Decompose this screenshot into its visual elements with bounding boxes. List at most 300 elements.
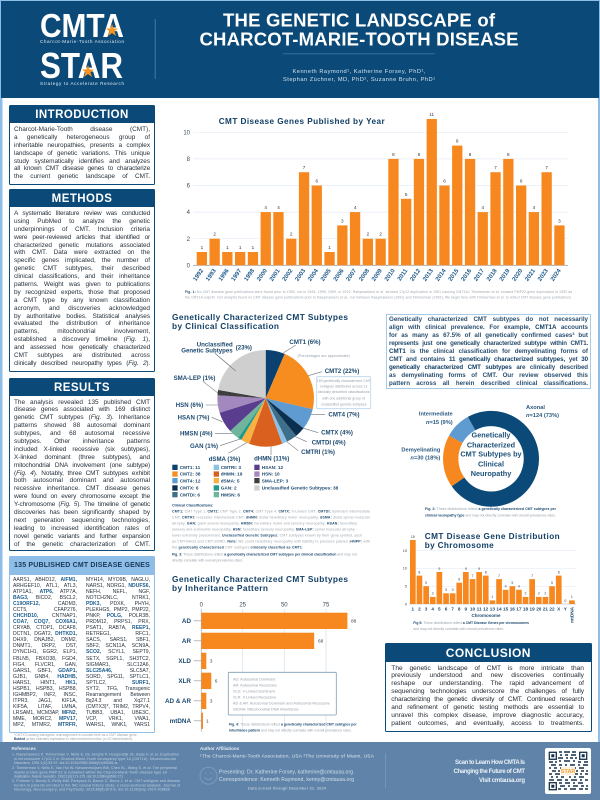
gene list: right column: SLC25A46, SLC5A7, [86, 668, 150, 674]
chart title: clinical classification: Genetically Characterized CMT Subtypes [172, 312, 348, 322]
title [200, 10, 518, 50]
bar chart: gene distribution by chromosome: 2 [432, 592, 434, 596]
gene list: left column: CCT5, CFAP276, [13, 607, 77, 613]
chart title: chromosome: CMT Disease Gene Distribution [425, 532, 560, 541]
presenter and correspondence [219, 770, 354, 790]
pie legend [172, 465, 339, 497]
bar chart: CMT disease genes published by year: 1 [252, 245, 255, 250]
bar chart: CMT disease genes published by year: 6 [316, 178, 319, 184]
text block: results: patterns showed 88 autosomal dominant [14, 422, 150, 429]
bar chart: gene distribution by chromosome: 0 [405, 602, 407, 606]
clinical classifications note [172, 504, 371, 549]
text block: clinical prevalence: for as many as 67.5% of all genetically confirmed cases³ but [389, 332, 588, 339]
donut labels: n=30 (18%) [410, 456, 440, 462]
slice labels: CMT4 (7%) [328, 411, 360, 418]
text block: methods: patterns, mitochondrial involvement, [14, 328, 150, 335]
gene list: right column: Rearrangement Between [86, 692, 150, 698]
bar chart: subtypes by inheritance pattern: AR [182, 638, 191, 645]
bar chart: CMT disease genes published by year: 2016 [461, 268, 474, 283]
text block: clinical prevalence: pattern across all herein described clinical classifications. [389, 380, 588, 387]
gene list: left column: MME, MORC2, MPV17, [13, 716, 77, 722]
pie chart: subtypes by clinical classification: by Clinical Classification [172, 321, 279, 331]
logo: STAR: Strategy to Accelerate Research [40, 81, 124, 86]
bar chart: gene distribution by chromosome: 9 [465, 567, 467, 571]
donut center label: Genetically [472, 430, 511, 440]
text block: introduction: study systematically identifies and analyzes [14, 158, 150, 165]
donut labels [401, 405, 559, 462]
bar chart: gene distribution by chromosome: 7 [531, 574, 533, 578]
bar chart: CMT disease genes published by year: 8 [469, 152, 472, 157]
presenter and correspondence: Data current through December 31, 2024 [248, 786, 326, 790]
caption: figure 1 [185, 290, 572, 300]
gene list: left column: CRYAB, CTDP1, DCAF8, [13, 625, 77, 631]
bar chart: CMT disease genes published by year: 2021 [524, 268, 537, 283]
inheritance legend box [228, 672, 336, 715]
gene list: right column: WARS1, WNK1, YARS1 [86, 722, 150, 728]
bar chart: gene distribution by chromosome: 18 [523, 607, 528, 612]
gene list: right column: 8q24.3 and Xq27.1 [86, 698, 150, 704]
gene list: left column: DNMT1, DRP2, DST, [13, 643, 77, 649]
text block: introduction [14, 126, 150, 180]
text block: results: genetic CMT subtypes (Fig. 3). Inheritance [14, 414, 150, 421]
clinical classifications note: lower extremity predominant, Unclassified Genetic Subtypes: CMT subtypes known by their gene symbol, such [172, 533, 362, 537]
heading: methods [10, 190, 154, 207]
bar chart: CMT disease genes published by year: 2 [379, 232, 382, 237]
text block: methods: by authoritative bodies. Statistical analyses [14, 313, 150, 320]
references: 3. Fridman V, Bundy B, Reilly MM, Pareyson D, Bacon C, Burns J, et al. CMT subtypes and disease [12, 779, 180, 783]
gene list: left column: AARS1, ABHD12, AIFM1, [13, 577, 77, 583]
bar chart: CMT disease genes published by year: 6 [187, 184, 191, 190]
bar chart: CMT disease genes published by year: 2 [290, 232, 293, 237]
gene list: left column: GJB1, GNB4, HADHB, [13, 674, 77, 680]
gene list: right column: NEFH, NEFL, NGF, [86, 589, 150, 595]
bar chart: gene distribution by chromosome: mtDNA [569, 606, 574, 623]
bar chart: CMT disease genes published by year: 1992 [193, 268, 206, 283]
caption: figure 2: Fig. 2: These distributions reflect a genetically characterized CMT subtypes per [425, 507, 557, 511]
heading: published genes [10, 557, 154, 575]
gene list: left column: HSPB1, HSPB3, HSPB8, [13, 686, 77, 692]
bar chart: CMT disease genes published by year: 0 [187, 263, 191, 269]
caption: figure 2: clinical neuropathy type and may not directly correlate with overall prevalence rates. [425, 514, 556, 518]
references: 1. Raeymaekers P, Timmerman V, Nelis E, De Jonghe P, Hoogendijk JE, Baas F, et al. Duplication [12, 752, 179, 756]
text block: methods: were peer-reviewed articles that identified or [14, 234, 150, 241]
text block: methods: patterns. Weight was given to publications [14, 281, 150, 288]
panel: published genes [9, 556, 155, 733]
bar chart: gene distribution by chromosome: 5 [551, 581, 553, 585]
bar chart: CMT disease genes published by year: 2 [187, 237, 191, 243]
heading: introduction: INTRODUCTION [35, 109, 129, 121]
gene list: right column: PLEKHG5, PMP2, PMP22, [86, 607, 150, 613]
gene list: left column: C19ORF12, CADM3, [13, 601, 77, 607]
text block: clinical prevalence: CMT1 is the clinical classification for demyelinating forms of [389, 348, 588, 355]
clinical classifications note: sensory and autonomic neuropathy, HSN: hereditary sensory neuropathy, SMA-LEP: spinal muscular atrophy - [172, 527, 358, 531]
text block: clinical prevalence [389, 316, 588, 387]
bar chart: gene distribution by chromosome: 7 [451, 607, 454, 612]
clinical classifications note: as CMT-BAG3 and CMT-SORD. Note: We count hereditary neuropathy with liability to pressure palsies (HNPP) with [172, 539, 370, 543]
QR code: STAR [561, 769, 575, 775]
text block: clinical prevalence: CMT and contains 11 genetically characterized subtypes, yet 30 [389, 356, 588, 363]
donut labels: Demyelinating [401, 448, 441, 454]
bar chart: CMT disease genes published by year: 2018 [486, 268, 499, 283]
bar chart: CMT disease genes published by year: 1996 [218, 268, 231, 283]
bar chart: subtypes by inheritance pattern: by Inheritance Pattern [172, 583, 268, 593]
slice labels: dSMA (3%) [209, 456, 240, 463]
slice labels: dHMN (11%) [254, 455, 289, 462]
bar chart: CMT disease genes published by year: 6 [520, 178, 523, 184]
gene list: right column: (CMTX3)*, TRIM2, TRPV4, [86, 704, 150, 710]
pie legend: dHMN: 19 [221, 472, 243, 477]
bar chart: gene distribution by chromosome: 9 [478, 567, 480, 571]
donut labels: n=15 (9%) [426, 420, 453, 426]
slice labels: HMSN (4%) [180, 431, 213, 438]
panel: conclusion [385, 643, 592, 732]
references: in chromosome 17p11.2 in Charcot-Marie-Tooth neuropathy type 1A (CMT1A). Neuromuscular [14, 757, 177, 761]
bar chart: CMT disease genes published by year: 2001 [269, 268, 282, 283]
authors: Kenneth Raymond¹, Katherine Forsey, PhD¹, [292, 69, 426, 75]
bar chart: gene distribution by chromosome: 10 [470, 607, 475, 612]
text block: introduction: Charcot-Marie-Tooth disease (CMT), [14, 126, 150, 133]
bar chart: CMT disease genes published by year: 3 [558, 218, 561, 223]
bar chart: gene distribution by chromosome: 7 [498, 574, 500, 578]
bar chart: gene distribution by chromosome [403, 532, 576, 631]
bar chart: CMT disease genes published by year: 9 [456, 139, 459, 144]
bar chart: gene distribution by chromosome: 8 [418, 570, 420, 574]
donut center label [460, 430, 523, 478]
references: myelin protein gene PMP-22 is contained within the Charcot-Marie-Tooth disease type 1A [14, 770, 168, 774]
gene list: right column: SIGMAR1, SLC12A6, [86, 662, 150, 668]
pie legend: CMT4: 12 [180, 478, 201, 483]
gene list: left column: FBLN5, FBXO38, FGD4, [13, 656, 77, 662]
heading: methods: METHODS [52, 193, 112, 205]
bar chart: CMT disease genes published by year: 2009 [371, 268, 384, 283]
bar chart: gene distribution by chromosome: 6 [445, 607, 448, 612]
references: 2. Timmerman V, Nelis E, Van Hul W, Nieuwenhuijsen BW, Chen KL, Wang S, et al. The peripheral [12, 766, 177, 770]
text block: results: discoveries has been significantly shaped by [14, 509, 150, 516]
bar chart: gene distribution by chromosome: 2 [544, 592, 546, 596]
bar chart: gene distribution by chromosome: 4 [518, 585, 520, 589]
bar chart: subtypes by inheritance pattern: 3 [210, 699, 213, 705]
bar chart: CMT disease genes published by year: 8 [392, 152, 395, 157]
text block: methods: and assessed how genetically characterized [14, 344, 150, 351]
text block: conclusion: The genetic landscape of CMT is more intricate than [391, 665, 584, 672]
author affiliations [200, 746, 375, 760]
bar chart: gene distribution by chromosome: 8 [458, 607, 461, 612]
gene list: left column: CHCHD10, CNTNAP1, [13, 613, 77, 619]
references: Disorders. 1991;1(2):93-97. doi:10.1016/0960-8966(91)90055-w. [14, 761, 118, 765]
caption: figure 5 [413, 621, 529, 631]
gene list: right column: MYH14, MYO9B, NAGLU, [86, 577, 150, 583]
text block: clinical prevalence: align with clinical prevalence. For example, CMT1A accounts [389, 324, 588, 331]
bar chart: gene distribution by chromosome: 2 [525, 592, 527, 596]
slice labels: CMT1 (6%) [289, 339, 321, 346]
gene list: left column: MPZ, MTMR2, MTRFR, [13, 722, 77, 728]
bar chart: subtypes by inheritance pattern: 75 [323, 602, 330, 608]
bar chart: gene distribution by chromosome: 9 [438, 567, 440, 571]
bar chart: subtypes by inheritance pattern: 25 [239, 602, 247, 608]
panel: results [9, 378, 155, 551]
bar chart: CMT disease genes published by year: 1 [328, 245, 331, 250]
text block: results: leading to increased identification rates of [14, 525, 150, 532]
text block: conclusion: sequencing technologies underscore the challenges of fully [391, 688, 584, 695]
bar chart: gene distribution by chromosome: Chromosome [471, 613, 501, 618]
text block: results: X-linked dominant (three subtypes), and [14, 454, 150, 461]
text block: results: recessive inheritance. CMT disease genes [14, 485, 150, 492]
text block: introduction: landscape of genetic variations. This unique [14, 150, 150, 157]
gene list: left column [13, 577, 77, 728]
bar chart: subtypes by inheritance pattern: mtDNA [170, 718, 191, 725]
gene list: left column: COA7, COQ7, COX6A1, [13, 619, 77, 625]
gene list: left column: DCTN1, DGAT2, DHTKD1, [13, 631, 77, 637]
bar chart: gene distribution by chromosome: 2 [418, 607, 421, 612]
text block: conclusion [391, 665, 584, 727]
text block: conclusion: characterizing the genetic diversity of CMT. Continued research [391, 696, 584, 703]
bar chart: gene distribution by chromosome: 4 [505, 585, 507, 589]
logo: CMTA: CMTA [40, 7, 124, 44]
footer [12, 746, 591, 794]
gene list: right column: SORD, SPG11, SPTLC1, [86, 674, 150, 680]
bar chart: CMT disease genes published by year: 1998 [244, 268, 257, 283]
slice labels: CMTRI (1%) [301, 449, 335, 456]
caption: figure 2 [425, 507, 557, 518]
authors: Stephan Züchner, MD, PhD², Suzanne Bruhn, PhD¹ [283, 77, 435, 83]
slice labels: Unclassified [197, 341, 233, 348]
slice labels: Genetic Subtypes [181, 348, 233, 355]
pie legend: CMTDI: 6 [180, 492, 200, 497]
bar chart: gene distribution by chromosome: 1 [571, 595, 573, 599]
bar chart: CMT disease genes published by year: 2023 [537, 268, 550, 283]
gene list: left column: IGHMBP2, INF2, INSC, [13, 692, 77, 698]
footnote: gene list [14, 732, 138, 741]
donut center label: Characterized [467, 440, 515, 449]
bar chart: subtypes by inheritance pattern: 3 [210, 659, 213, 665]
slice labels: HSAN (7%) [178, 415, 209, 422]
bar chart: CMT disease genes published by year: 8 [507, 152, 510, 157]
panel: methods [9, 189, 155, 372]
gene list: left column: GARS1, GBF1, GDAP1, [13, 668, 77, 674]
bar chart: CMT disease genes published by year: 2002 [282, 268, 295, 283]
bar chart: subtypes by inheritance pattern: AD & AR [165, 698, 191, 705]
text block: clinical prevalence: represents just one genetically characterized subtype within CMT1. [389, 340, 588, 347]
gene list: right column: SYT2, TFG, Transgenic [86, 686, 150, 692]
text block: methods: clinical classifications, and their inheritance [14, 273, 150, 280]
panel: clinical prevalence callout [386, 314, 591, 389]
bar chart: CMT disease genes published by year: 2005 [320, 268, 333, 283]
bar chart: gene distribution by chromosome: 3 [425, 607, 428, 612]
text block: methods [14, 210, 150, 367]
pie legend: CMT1: 11 [180, 465, 201, 470]
slice labels: HSN (6%) [176, 402, 203, 409]
bar chart: CMT disease genes published by year: 11 [429, 112, 435, 117]
author affiliations: Author Affiliations [200, 746, 240, 751]
references: duplication. Nature Genetics. 1992;1(3):171-175. doi:10.1038/ng0692-171. [14, 775, 124, 779]
text block: results: next generation sequencing technologies, [14, 517, 150, 524]
gene list: right column: RETREG1, RFC1, [86, 631, 150, 637]
panel: introduction [9, 105, 155, 185]
bar chart: subtypes by inheritance pattern: 88 [351, 619, 357, 625]
references: References [12, 746, 36, 751]
gene list: left column: DYNC1H1, EGR2, ELP1, [13, 649, 77, 655]
QR code [545, 748, 591, 794]
bar chart: CMT disease genes published by year: 4 [354, 205, 357, 210]
text block: results: of the genetic characterization of CMT. [14, 541, 150, 548]
text block: results: novel genetic variants and further expansion [14, 533, 150, 540]
gene list: left column: FIG4, FLVCR1, GAN, [13, 662, 77, 668]
slice labels: GAN (1%) [190, 443, 218, 450]
pie legend: dSMA: 5 [221, 478, 240, 483]
pie legend: CMT2: 38 [180, 472, 201, 477]
bar chart: gene distribution by chromosome: 3 [445, 588, 447, 592]
pie legend: GAN: 2 [221, 486, 237, 491]
text block: results: The analysis revealed 135 published CMT [14, 398, 150, 406]
scan call to action [454, 760, 526, 784]
bar chart: CMT disease genes published by year: 2006 [333, 268, 346, 283]
bar chart: subtypes by inheritance pattern: 50 [281, 602, 288, 608]
callout: subtypes note [317, 377, 372, 409]
clinical classifications note: Clinical Classifications: [172, 504, 213, 508]
callout: subtypes note: 169 genetically characterized CMT [317, 379, 372, 383]
text block: conclusion: reshape our understanding. The rapid advancement of [391, 680, 584, 687]
gene list: left column: KIF5A, LITAF, LMNA, [13, 704, 77, 710]
text block: methods: with CMT. Data were extracted on the [14, 249, 150, 256]
slice labels: (23%) [236, 345, 252, 352]
gene list: right column: SETX, SGPL1, SH3TC2, [86, 656, 150, 662]
bar chart: gene distribution by chromosome: 5 [511, 581, 513, 585]
heading: conclusion [386, 644, 591, 662]
bar chart: CMT disease genes published by year: 8 [187, 157, 191, 163]
pie legend: SMA-LEP: 3 [262, 478, 289, 483]
text block: conclusion: unravel this complex disease, improve diagnostic accuracy, [391, 712, 584, 719]
gene list: right column: PDK3, PDXK, PHYH, [86, 601, 150, 607]
inheritance legend box: AR: Autosomal Recessive [233, 683, 277, 687]
bar chart: subtypes by inheritance pattern: XLR [178, 678, 191, 685]
gene list: right column: SCO2, SCYL1, SEPT9, [86, 649, 150, 655]
bar chart: CMT disease genes published by year: 2 [367, 232, 370, 237]
clinical classifications note: CMT1: CMT Type 1, CMT2: CMT Type 2, CMT4: CMT Type 4, CMTX: X-Linked CMT, CMTDI: dominant intermediate [172, 510, 370, 514]
caption: figure 5: and may not directly correlate with overall prevalence rates. [413, 627, 504, 631]
bar chart: gene distribution by chromosome: 12 [483, 607, 489, 612]
bar chart: CMT disease genes published by year: 1 [226, 245, 229, 250]
pie legend: HSAN: 12 [262, 465, 283, 470]
text block: results: (Fig. 4). Notably, three CMT subtypes exhibit [14, 470, 150, 477]
caption: figure 3: directly correlate with overall prevalence rates. [172, 559, 243, 563]
text block: introduction: the current genetic landscape of CMT. [14, 173, 150, 180]
bar chart: gene distribution by chromosome: 14 [496, 607, 502, 612]
callout: subtypes note: with one additional group of [322, 396, 365, 400]
text block: results: disease genes associated with 169 distinct [14, 406, 150, 413]
donut center label: Neuropathy [471, 469, 512, 478]
text block: introduction: all known CMT disease genes to characterize [14, 165, 150, 172]
text block: results: included X-linked recessive (six subtypes), [14, 446, 150, 453]
bar chart: gene distribution by chromosome: X [557, 607, 561, 612]
text block: conclusion: and refinement of genetic testing methods are essential to [391, 704, 584, 711]
bar chart: gene distribution by chromosome: 8 [558, 570, 560, 574]
caption: figure 4: Fig. 4: These distributions reflect a genetically characterized CMT subtypes per [229, 723, 357, 727]
caption: figure 4: inheritance pattern and may not directly correlate with overall prevalence rates. [229, 729, 352, 733]
bar chart: CMT disease genes published by year: 2 [213, 232, 216, 237]
gene list: right column: VCP, VRK1, VWA1, [86, 716, 150, 722]
presenter and correspondence: Presenting: Dr. Katherine Forsey, katherine@cmtausa.org [219, 770, 353, 776]
caption: figure 1: Fig. 1: No CMT disease gene publications were found prior to 1992, nor in 1994, 1995, 1999, or 2022. Raeymaekers et al. showed 17p12 duplication in 1991 causing CMT1A¹; Timmerman et al. showed PMP22 gene duplication in 1992 as [185, 290, 572, 294]
bar chart: gene distribution by chromosome: 6 [458, 578, 460, 582]
bar chart: CMT disease genes published by year: 2010 [384, 268, 397, 283]
bar chart: CMT disease genes published by year [183, 112, 572, 300]
text block: methods: characterized genetic mutations associated [14, 242, 150, 249]
bar chart: CMT disease genes published by year: 2004 [307, 268, 320, 283]
gene list: left column: ATP1A1, ATP6, ATP7A, [13, 589, 77, 595]
caption: figure 5: Fig 5: These distributions reflect a CMT Disease Genes per chromosomes [413, 621, 529, 625]
pie legend: Unclassified Genetic Subtypes: 38 [262, 486, 339, 491]
text block: methods: evaluated the distribution of inheritance [14, 320, 150, 327]
gene list: left column: DHX9, DNAJB2, DNM2, [13, 637, 77, 643]
presenter and correspondence: Correspondence: Kenneth Raymond, kenny@cmtausa.org [219, 777, 354, 783]
bar chart: gene distribution by chromosome: 11 [477, 607, 482, 612]
bar chart: CMT disease genes published by year: 2019 [499, 268, 512, 283]
bar chart: CMT disease genes published by year: 5 [405, 192, 408, 197]
text block: results: subtypes, and 68 autosomal recessive [14, 430, 150, 437]
callout: subtypes note: clinically described classifications [318, 390, 370, 394]
text block: methods: genetic CMT subtypes, their described [14, 265, 150, 272]
gene list: left column: HARS1, HINT1, HK1, [13, 680, 77, 686]
bar chart: CMT disease genes published by year: 8 [418, 152, 421, 157]
gene list: right column: PNKP, POLG, POLR3B, [86, 613, 150, 619]
bar chart: CMT disease genes published by year: 2007 [346, 268, 359, 283]
slice labels: CMT2 (22%) [325, 368, 359, 375]
text block: results: were found on every chromosome except the [14, 493, 150, 500]
gene list: right column: PSAT1, RAB7A, REEP1, [86, 625, 150, 631]
text block: methods: underpinnings of CMT. Inclusion criteria [14, 226, 150, 233]
bar chart: gene distribution by chromosome: 2 [538, 592, 540, 596]
gene list: right column: NOTCH2NLC, NTRK1, [86, 595, 150, 601]
text block: conclusion: patient outcomes, and eventually, access to treatments. [391, 720, 584, 727]
text block: results: mitochondrial DNA involvement (one subtype) [14, 462, 150, 469]
clinical classifications note: the genetically characterized CMT subtypes clinically classified as CMT1. [172, 545, 303, 549]
donut center label: CMT Subtypes by [460, 450, 523, 459]
bar chart: gene distribution by chromosome: 20 [536, 607, 542, 612]
bar chart: gene distribution by chromosome: 8 [485, 570, 487, 574]
pie legend: HSN: 10 [262, 472, 280, 477]
text block: methods: by recognized experts, those that proposed [14, 289, 150, 296]
slice labels: SMA-LEP (1%) [174, 375, 215, 382]
gene list: right column: NARS1, NDRG1, NDUFS6, [86, 583, 150, 589]
text block: methods: established a discovery timeline (Fig. 1), [14, 336, 150, 343]
text block: results [14, 398, 150, 548]
leader lines [203, 345, 325, 455]
bar chart: gene distribution by chromosome: 19 [529, 607, 535, 612]
bar chart: CMT disease genes published by year: 3 [341, 218, 344, 223]
text block: methods: specific genes implicated, the number of [14, 257, 150, 264]
bar chart: gene distribution by chromosome: 5 [425, 581, 427, 585]
text block: methods: acronym, and discoveries acknowledged [14, 305, 150, 312]
scan call to action: Changing the Future of CMT [454, 769, 525, 775]
bar chart: CMT disease genes published by year: 2003 [295, 268, 308, 283]
bar chart: gene distribution by chromosome: 17 [516, 607, 522, 612]
pie slices [217, 350, 314, 447]
heading: conclusion: CONCLUSION [446, 646, 531, 660]
bar chart: CMT disease genes published by year: 2000 [256, 268, 269, 283]
donut chart: subtypes by clinical neuropathy [401, 405, 559, 518]
gene list: right column: SPTLC2, SURF1, [86, 680, 150, 686]
donut center label: Clinical [478, 459, 504, 468]
text block: conclusion: previously understood and new discoveries continually [391, 672, 584, 679]
references: Neurology, Neurosurgery, and Psychiatry. 2015;86(8):873-8. doi:10.1136/jnnp-2014-308826 [14, 788, 170, 792]
slice labels: CMTX (4%) [321, 429, 353, 436]
text block: results: Y-chromosome (Fig. 5). The timeline of genetic [14, 501, 150, 508]
slice labels [174, 339, 360, 463]
callout: subtypes note: unclassified genetic subtypes [321, 402, 367, 406]
text block: results: subtypes. Other inheritance patterns [14, 438, 150, 445]
bar chart: gene distribution by chromosome: 5 [405, 585, 407, 589]
text block: clinical prevalence: genetically characterized CMT subtypes are clinically described [389, 364, 588, 371]
